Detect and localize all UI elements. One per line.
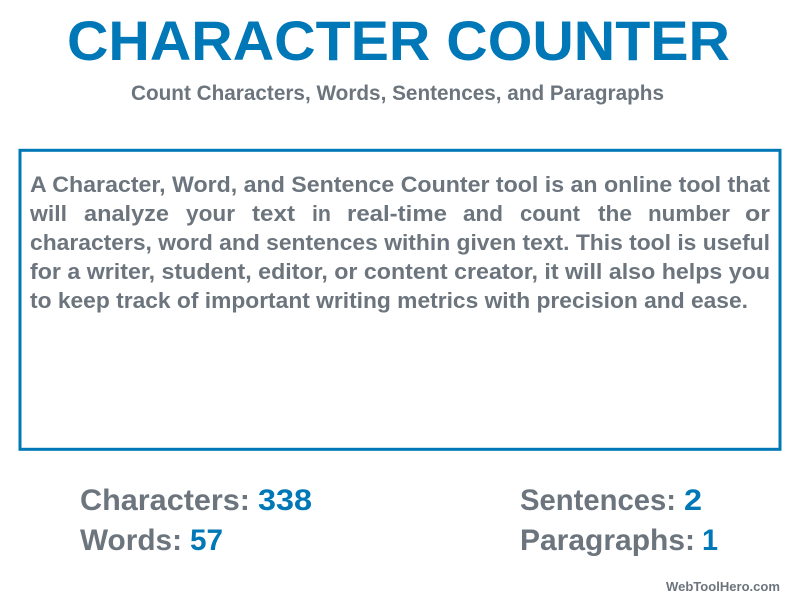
description text: number: [648, 201, 730, 226]
description text: real-time: [347, 201, 447, 226]
stat: paragraphs: Paragraphs:: [520, 524, 695, 557]
description text: will: [29, 201, 67, 226]
stat: words: Words:: [80, 524, 182, 557]
stat: characters: Characters:: [80, 484, 250, 517]
description text: [29, 172, 771, 313]
description text: A Character, Word, and Sentence Counter tool is an online tool that: [30, 172, 771, 197]
stat: sentences: 2: [684, 484, 702, 517]
description text: for a writer, student, editor, or content creator, it will also helps you: [30, 259, 770, 284]
panel: text box: [20, 150, 780, 449]
description text: analyze: [84, 201, 169, 226]
description text: characters, word and sentences within given text. This tool is useful: [30, 230, 770, 255]
description text: to keep track of important writing metrics with precision and ease.: [30, 288, 748, 313]
stat: sentences: Sentences:: [520, 484, 676, 517]
description text: and: [463, 201, 503, 226]
subtitle: Count Characters, Words, Sentences, and Paragraphs: [131, 82, 664, 105]
brand credit: WebToolHero.com: [666, 579, 780, 594]
description text: your: [186, 201, 235, 226]
description text: the: [598, 201, 632, 226]
description text: or: [745, 201, 770, 226]
description text: text: [252, 201, 296, 226]
description text: count: [520, 201, 581, 226]
stat: paragraphs: 1: [702, 524, 718, 557]
stat: characters: 338: [258, 484, 312, 517]
description text: in: [312, 201, 331, 226]
stat: words: 57: [190, 524, 223, 557]
title: CHARACTER COUNTER: [67, 9, 730, 72]
